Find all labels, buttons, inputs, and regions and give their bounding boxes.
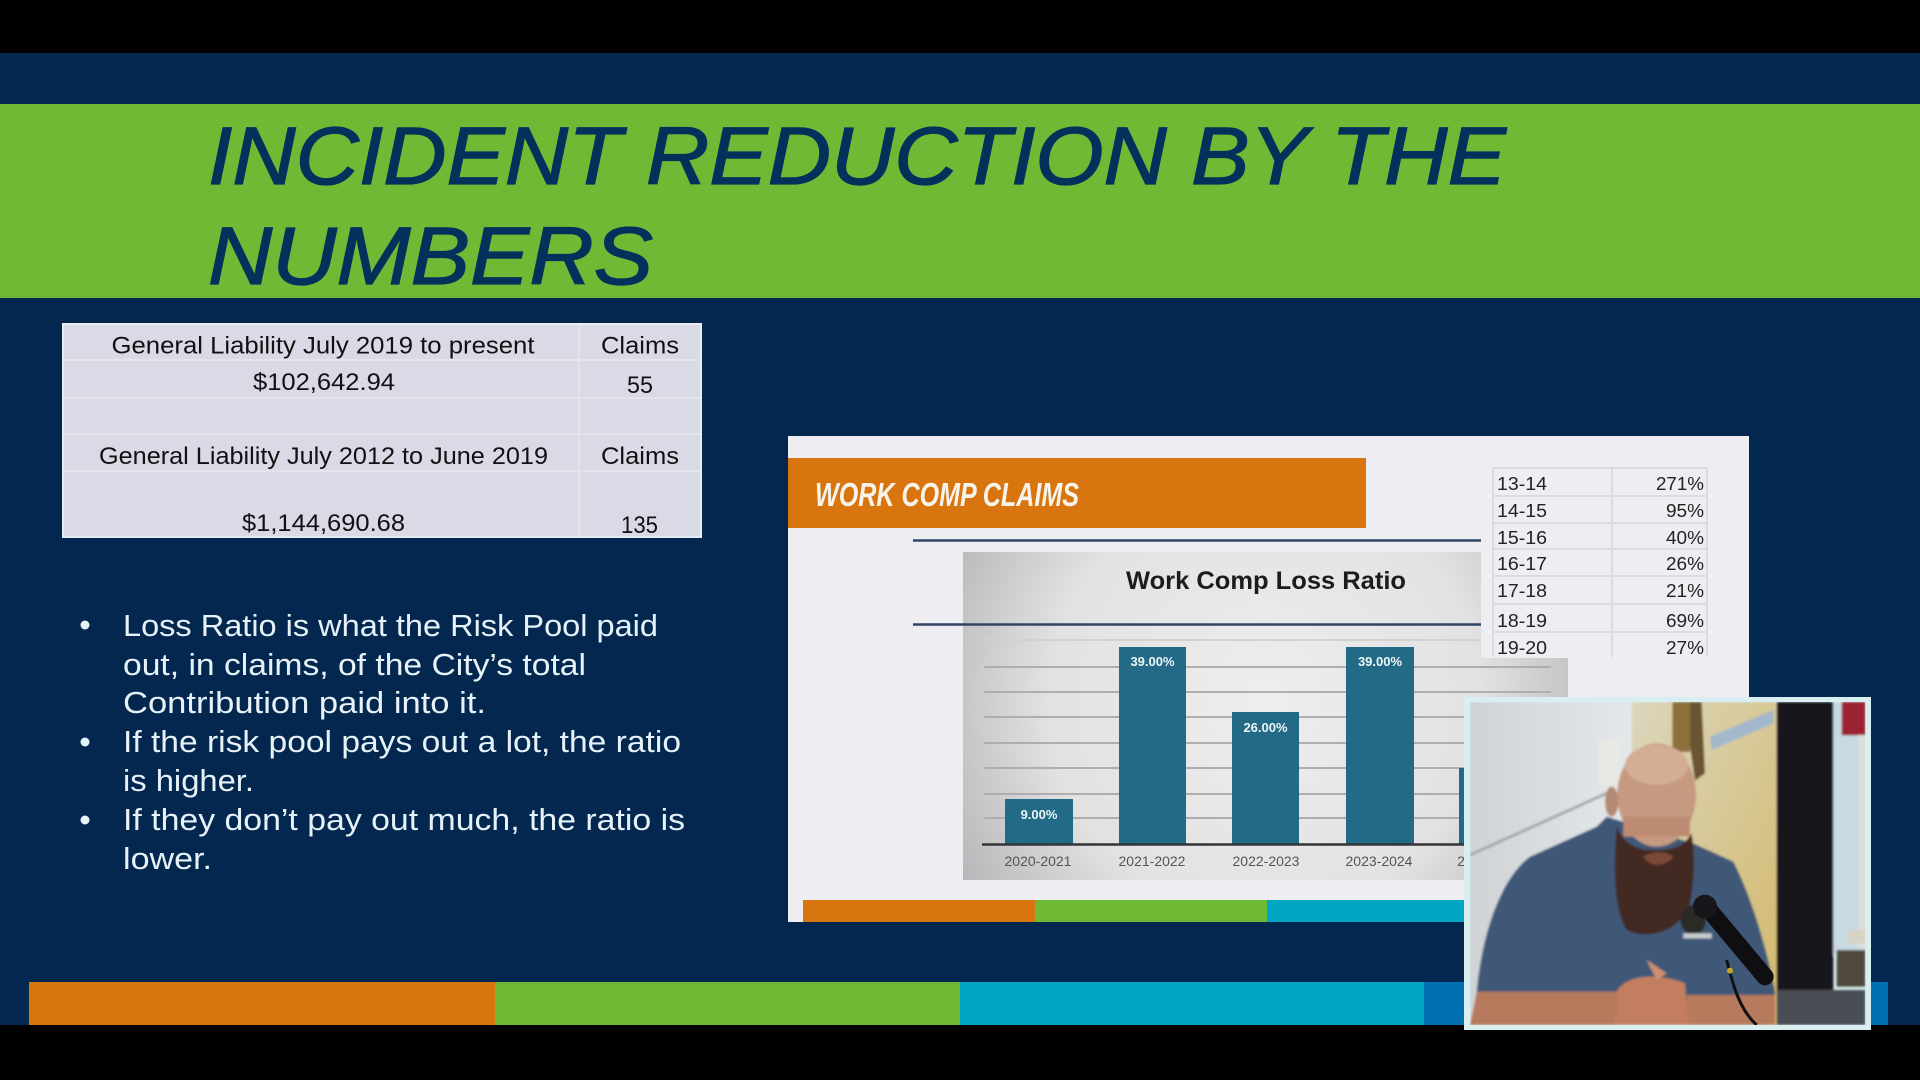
value labels: 39.00% [1130,654,1175,669]
heading: work comp claims: WORK COMP CLAIMS [815,476,1079,513]
title [208,111,1507,302]
chart: work comp loss ratio [913,540,1568,880]
loss ratio table: 17-18 [1497,581,1547,601]
panel: general liability table: $1,144,690.68 [242,510,405,537]
bullet list: If the risk pool pays out a lot, the ratio [123,724,681,759]
panel: general liability table: General Liability July 2012 to June 2019 [99,443,548,470]
title banner [0,104,1920,302]
bullet list: If they don’t pay out much, the ratio is [123,802,685,837]
bullet list: out, in claims, of the City’s total [123,647,586,682]
year labels [1005,853,1465,869]
inner color bar [803,900,1499,922]
value labels: 39.00% [1358,654,1402,669]
bullet list: is higher. [123,763,254,798]
panel: general liability table: $102,642.94 [253,369,395,396]
value labels: 9.00% [1021,807,1058,822]
panel: general liability table: 135 [621,512,658,539]
bullet list [80,608,685,876]
loss ratio table: 95% [1666,501,1704,521]
panel: general liability table: Claims [601,332,679,360]
year labels: 2022-2023 [1233,853,1300,869]
value labels [1021,654,1402,822]
loss ratio table [1481,460,1749,658]
year labels: 2020-2021 [1005,853,1072,869]
year labels: 2023-2024 [1346,853,1413,869]
loss ratio table: 27% [1666,638,1704,658]
heading: work comp claims [788,458,1366,528]
title: INCIDENT REDUCTION BY THE [208,111,1507,202]
bars [1005,647,1527,844]
loss ratio table: 26% [1666,554,1704,574]
loss ratio table: 19-20 [1497,638,1547,658]
loss ratio table: 15-16 [1497,528,1547,548]
bullet list: Contribution paid into it. [123,685,486,720]
value labels: 26.00% [1243,720,1288,735]
loss ratio table: 16-17 [1497,554,1547,574]
loss ratio table: 18-19 [1497,611,1547,631]
panel: general liability table: Claims [601,443,679,470]
title: NUMBERS [208,211,653,302]
webcam photo: speaker at microphone [1470,702,1865,1025]
panel: work comp claims slide [788,436,1749,922]
panel: general liability table: General Liability July 2019 to present [112,332,535,360]
loss ratio table: 14-15 [1497,501,1547,521]
bullet list: Loss Ratio is what the Risk Pool paid [123,608,658,643]
bottom color bar [29,982,1888,1025]
panel: general liability table: 55 [627,372,653,399]
year labels: 2021-2022 [1119,853,1186,869]
loss ratio table: 13-14 [1497,474,1547,494]
webcam frame [1464,697,1871,1030]
loss ratio table: 40% [1666,528,1704,548]
loss ratio table: 69% [1666,611,1704,631]
chart title: Work Comp Loss Ratio [1126,567,1406,595]
panel: general liability table [62,323,702,539]
year labels: 2 [1457,853,1465,869]
loss ratio table: 21% [1666,581,1704,601]
bullet list: lower. [123,841,212,876]
loss ratio table: 271% [1656,474,1704,494]
